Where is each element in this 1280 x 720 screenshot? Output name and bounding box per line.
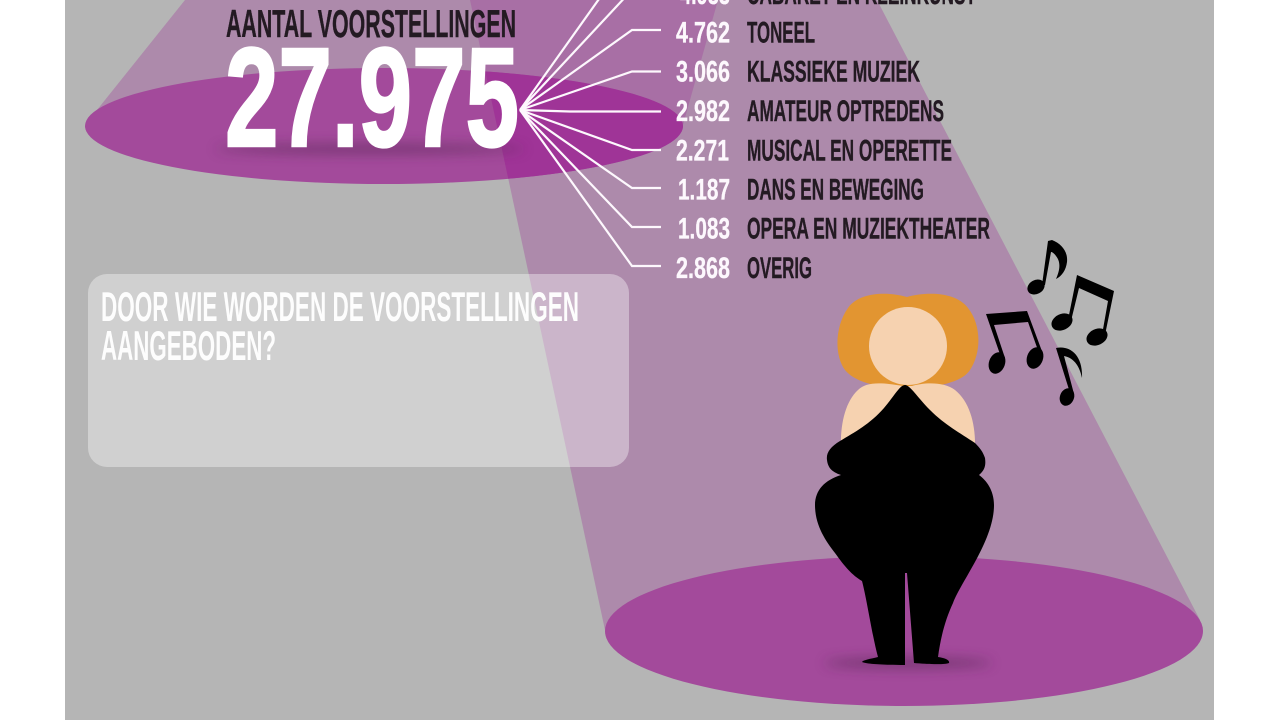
row: musical en operette: MUSICAL EN OPERETTE [747, 134, 952, 168]
row: opera en muziektheater: OPERA EN MUZIEKTHEATER [747, 212, 990, 246]
row: amateur optredens [676, 95, 944, 128]
row: dans en beweging: DANS EN BEWEGING [747, 174, 924, 206]
shoulders [841, 383, 975, 450]
row: klassieke muziek: KLASSIEKE MUZIEK [747, 56, 920, 88]
row: opera en muziektheater [678, 212, 990, 246]
spotlight pool: left [85, 68, 683, 184]
icon: music notes [986, 240, 1114, 408]
spotlight beam: right [470, 0, 1200, 630]
panel: door wie worden de voorstellingen aangeboden [88, 274, 629, 467]
note: double left [986, 311, 1046, 376]
panel heading: AANGEBODEN? [101, 322, 276, 369]
icon: opera singer [815, 294, 994, 665]
dress and legs [815, 385, 994, 665]
heading: aantal voorstellingen: AANTAL VOORSTELLINGEN [226, 3, 516, 46]
row: cabaret en kleinkunst [680, 0, 976, 11]
hair [837, 294, 978, 389]
row: opera en muziektheater: 1.083 [678, 212, 730, 246]
connector lines [520, 0, 661, 266]
row: musical en operette [676, 134, 952, 168]
row: overig: 2.868 [676, 252, 730, 285]
shadow under total number [215, 144, 525, 154]
shadow under singer [824, 658, 992, 668]
row: overig [676, 252, 812, 285]
panel heading [101, 283, 579, 369]
row: amateur optredens: AMATEUR OPTREDENS [747, 95, 944, 128]
note: single lower right [1056, 347, 1082, 408]
row: dans en beweging [678, 174, 924, 206]
spotlight pool: right [605, 556, 1203, 706]
row: musical en operette: 2.271 [676, 134, 729, 168]
note: double upper right [1049, 275, 1114, 349]
row: klassieke muziek: 3.066 [676, 56, 730, 88]
row: dans en beweging: 1.187 [678, 174, 730, 206]
row: toneel: TONEEL [747, 16, 815, 50]
note: single top [1025, 240, 1067, 297]
row: klassieke muziek [676, 56, 920, 88]
list: voorstellingen per genre [676, 0, 990, 285]
panel heading: DOOR WIE WORDEN DE VOORSTELLINGEN [101, 283, 579, 330]
row: toneel [676, 16, 815, 50]
spotlight beam: left [85, 0, 718, 125]
row: overig: OVERIG [747, 252, 812, 285]
face [869, 307, 947, 385]
spotlight overlap [486, 72, 683, 179]
row: toneel: 4.762 [676, 16, 730, 50]
total number: 27.975 [225, 18, 519, 176]
row: amateur optredens: 2.982 [676, 95, 730, 128]
